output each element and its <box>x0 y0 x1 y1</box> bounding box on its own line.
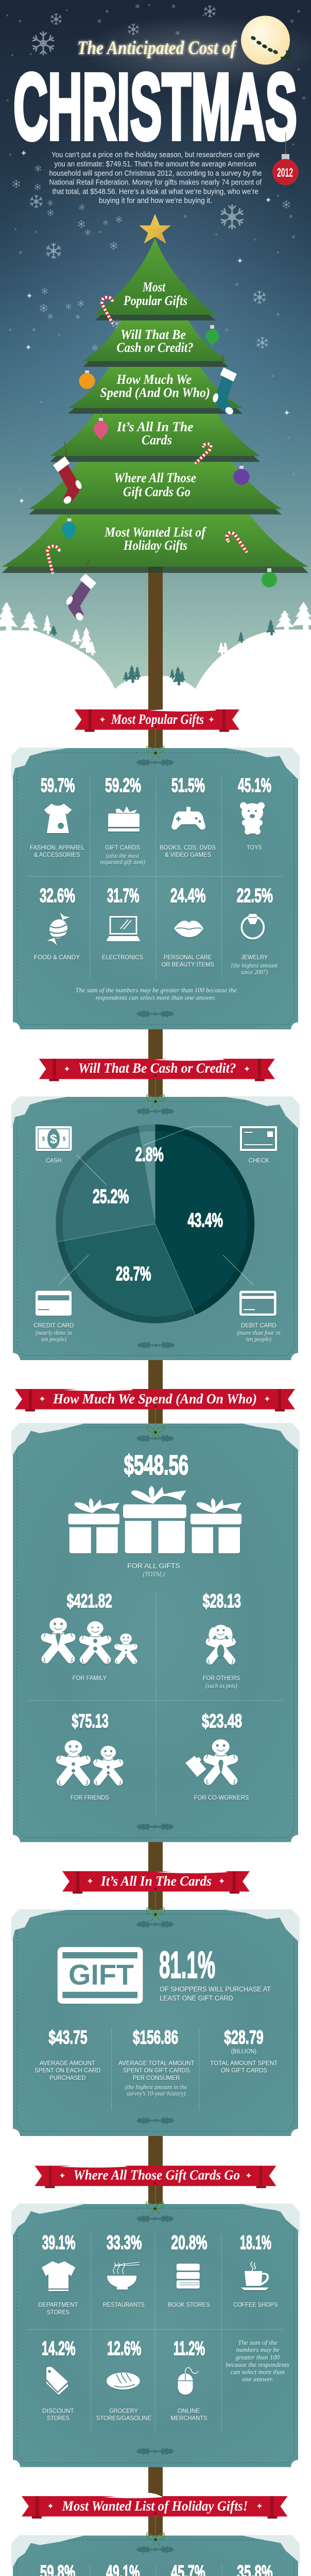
stat: average per consumer: SPENT ON GIFT CARDS <box>123 2067 189 2074</box>
tier shadows <box>2 315 308 573</box>
stat: average per consumer: survey’s 10-year history) <box>127 2090 185 2097</box>
stat: department stores: DEPARTMENT <box>38 2301 78 2308</box>
ornament green <box>205 316 219 346</box>
stat: books cds: & VIDEO GAMES <box>165 851 211 858</box>
stat: for co-workers: FOR CO-WORKERS <box>194 1794 249 1801</box>
stat: discount stores: STORES <box>47 2414 70 2421</box>
ornament pink <box>94 410 108 440</box>
tree menu labels: It’s All In The <box>116 419 194 434</box>
stat: gift cards: requested gift item) <box>100 858 145 866</box>
icon: books <box>177 2264 200 2289</box>
intro paragraph: National Retail Federation. Money for gifts makes nearly 74 percent of <box>49 178 262 187</box>
pie chart: 2.8% <box>135 1144 164 1165</box>
stat: personal care: PERSONAL CARE <box>164 954 212 961</box>
stat: average per card: SPENT ON EACH CARD <box>34 2067 100 2074</box>
ornament teal <box>62 510 76 540</box>
white pine trees <box>0 602 311 655</box>
slice: check <box>139 1124 155 1224</box>
stat: jewelry: 22.5% <box>237 885 273 907</box>
footnote: because the respondents <box>226 2361 289 2368</box>
intro paragraph: buying it for and how we’re buying it. <box>99 197 212 205</box>
icon: gingerbread pet <box>208 1625 234 1664</box>
ornament 2012 <box>272 132 299 185</box>
stat: jewelry: since 2007) <box>241 969 268 976</box>
stat: coffee shops: 18.1% <box>240 2232 271 2253</box>
stat: gift cards: 59.2% <box>105 775 141 796</box>
stat: for others: (such as pets) <box>205 1682 237 1689</box>
stat: online merchants <box>170 2338 207 2421</box>
label: debit card <box>237 1321 281 1343</box>
stat: fashion: 59.7% <box>41 775 75 796</box>
tree menu labels: Gift Cards Go <box>123 484 191 499</box>
star topper <box>140 214 170 243</box>
tree menu labels: Holiday Gifts <box>123 538 187 553</box>
stat: total billion: TOTAL AMOUNT SPENT <box>210 2060 278 2067</box>
stat: online merchants: 11.2% <box>174 2338 205 2360</box>
stat: book stores <box>168 2232 210 2308</box>
banner: most popular gifts: Most Popular Gifts <box>111 711 204 727</box>
tree tier 4 <box>50 414 260 456</box>
icon: cash: $ <box>62 1136 66 1142</box>
banner: how much we spend: How Much We Spend (And On Who) <box>53 1391 257 1406</box>
tree menu labels: Will That Be <box>120 327 186 342</box>
stat: average per consumer: PER CONSUMER <box>133 2074 180 2081</box>
ornament green ball <box>262 559 277 587</box>
stat: grocery gasoline: GROCERY <box>109 2407 138 2414</box>
label: cash: CASH <box>46 1157 61 1164</box>
banner: all in the cards <box>62 1868 250 1894</box>
footnote: The sum of the <box>238 2338 278 2346</box>
stat: 81.1 percent <box>159 1944 271 2002</box>
stat: for co-workers <box>185 1710 249 1801</box>
stat: total billion: (BILLION) <box>231 2047 256 2055</box>
candy cane 4 <box>47 546 59 572</box>
footnote <box>226 2338 289 2383</box>
panel: where gift cards go <box>11 2182 300 2467</box>
stat: average per consumer: (the highest amount in the <box>125 2083 187 2091</box>
stat: average per consumer <box>118 2027 195 2097</box>
icon: computer mouse <box>178 2374 193 2395</box>
banner: how much we spend <box>15 1385 295 1412</box>
stat: gift cards: (also the most <box>106 852 139 859</box>
stat: total billion <box>210 2027 278 2074</box>
panel: most wanted list <box>11 2513 300 2576</box>
banner: where gift cards go: Where All Those Gift Cards Go <box>73 2167 240 2183</box>
footnote: numbers may be <box>236 2346 280 2353</box>
icon: santa sleigh silhouette <box>250 36 292 59</box>
stat: discount stores: DISCOUNT <box>42 2407 74 2414</box>
stat: average per consumer: $156.86 <box>133 2027 178 2048</box>
stat: online merchants: MERCHANTS <box>170 2414 207 2421</box>
christmas tree <box>2 238 308 573</box>
title script: The Anticipated Cost of <box>77 38 237 59</box>
icon: ring <box>241 914 264 939</box>
pie chart: 28.7% <box>116 1263 151 1285</box>
icon: gingerbread friends <box>59 1740 121 1785</box>
stat: fashion <box>30 775 85 858</box>
stat: 81.1 percent: 81.1% <box>159 1944 215 1986</box>
stat: toys: 45.1% <box>238 775 271 796</box>
tree menu labels: How Much We <box>116 372 192 387</box>
panel: cash or credit <box>11 1075 300 1360</box>
stat: total billion: ON GIFT CARDS <box>221 2067 267 2074</box>
icon: cash: $ <box>42 1136 45 1142</box>
banner: cash or credit: Will That Be Cash or Credit? <box>78 1060 236 1076</box>
stat: toys: TOYS <box>247 844 262 851</box>
stat: electronics: ELECTRONICS <box>102 954 143 961</box>
icon: game controller <box>171 807 205 829</box>
stat: department stores <box>38 2232 78 2316</box>
stat: for friends: $75.13 <box>72 1710 109 1732</box>
label: credit card: (nearly three in <box>36 1329 72 1336</box>
slice: credit card <box>58 1224 195 1323</box>
icon: cash <box>36 1126 72 1151</box>
stat: books cds: 51.5% <box>171 775 205 796</box>
teal pine trees <box>49 619 275 685</box>
stat: grocery gasoline: 12.6% <box>107 2338 141 2360</box>
stat: for others <box>203 1590 241 1689</box>
stat: for co-workers: $23.48 <box>202 1710 242 1732</box>
label: credit card <box>34 1321 74 1343</box>
slice: debit card <box>155 1124 254 1315</box>
stat: for others: $28.13 <box>203 1590 241 1612</box>
stat: average per consumer: AVERAGE TOTAL AMOUNT <box>118 2060 195 2067</box>
candy cane 3 <box>227 533 246 551</box>
total spend stat: FOR ALL GIFTS <box>127 1562 180 1570</box>
icon: bread <box>107 2372 140 2389</box>
stat: for friends <box>59 1710 121 1801</box>
banner: most popular gifts <box>74 706 239 732</box>
stocking red <box>46 442 87 506</box>
icon: gift card large <box>58 1947 143 2004</box>
intro paragraph: that total, at $548.56. Here’s a look at what we’re buying, who we’re <box>53 188 258 196</box>
stat: electronics: 31.7% <box>107 885 139 907</box>
icon: credit card <box>36 1291 72 1316</box>
tree menu labels: Most Wanted List of <box>104 524 206 540</box>
footnote <box>75 986 237 1002</box>
label: debit card: DEBIT CARD <box>241 1321 277 1329</box>
intro paragraph: household will spend on Christmas 2012, according to a survey by the <box>49 170 262 178</box>
icon: laptop <box>107 916 140 941</box>
stocking teal <box>210 355 244 416</box>
intro paragraph: You can’t put a price on the holiday season, but researchers can give <box>51 151 260 159</box>
stat: book stores: 20.8% <box>171 2232 207 2253</box>
stat: electronics <box>102 885 143 961</box>
stat: grocery gasoline: STORES/GASOLINE <box>96 2414 151 2421</box>
footnote: can select more than <box>231 2368 285 2376</box>
tree tier 2 <box>83 320 228 361</box>
total spend stat <box>68 1450 241 1578</box>
icon: noodle bowl <box>107 2276 136 2290</box>
stat: grocery gasoline <box>96 2338 151 2421</box>
stat: food candy <box>34 885 80 961</box>
background: night sky <box>0 0 311 693</box>
stat: personal care: OR BEAUTY ITEMS <box>162 961 214 968</box>
stat: fashion: FASHION, APPAREL <box>30 844 85 851</box>
panel: how much we spend <box>11 1405 300 1842</box>
stat: for family <box>44 1590 135 1682</box>
footnote: The sum of the numbers may be greater than 100 because the <box>75 986 237 994</box>
tree tier 1 <box>95 238 216 315</box>
snow hills and white ground <box>0 630 311 2576</box>
pie chart: 25.2% <box>93 1186 129 1208</box>
icon: three gifts <box>68 1486 241 1553</box>
stat: personal care <box>162 885 214 968</box>
stat: average per card: AVERAGE AMOUNT <box>40 2060 95 2067</box>
footnote: one answer. <box>242 2375 273 2383</box>
total spend stat: $548.56 <box>124 1450 188 1481</box>
icon: gift box <box>108 806 140 832</box>
stat: department stores: STORES <box>47 2309 70 2316</box>
tree trunk post <box>148 564 163 2576</box>
banner: most wanted list: Most Wanted List of Holiday Gifts! <box>62 2498 248 2514</box>
panel: most popular gifts <box>11 725 300 1029</box>
slice: cash <box>56 1126 155 1242</box>
label: debit card: ten people) <box>246 1335 271 1343</box>
moon with santa sleigh <box>241 15 292 65</box>
banner: where gift cards go <box>34 2162 277 2188</box>
stat: discount stores <box>42 2338 75 2421</box>
stat: books cds <box>160 775 216 858</box>
stat: for friends: FOR FRIENDS <box>71 1794 109 1801</box>
stat: jewelry: JEWELRY <box>241 954 268 961</box>
tree menu labels: Where All Those <box>114 470 196 485</box>
icon: gingerbread family <box>44 1618 135 1663</box>
stat: 81.1 percent: LEAST ONE GIFT CARD <box>160 1994 233 2002</box>
footnote: respondents can select more than one answer. <box>96 994 216 1002</box>
stat: for family: FOR FAMILY <box>73 1674 107 1682</box>
stat: 81.1 percent: OF SHOPPERS WILL PURCHASE AT <box>160 1985 271 1993</box>
stocking purple <box>61 560 103 623</box>
tree menu labels: Most <box>142 279 166 295</box>
tree menu labels <box>100 279 210 553</box>
icon: price tags <box>46 2367 68 2395</box>
ornament 2012: 2012 <box>277 166 293 180</box>
icon: cash: $ <box>50 1132 57 1146</box>
icon: coffee cup <box>241 2271 269 2290</box>
stat: food candy: FOOD & CANDY <box>34 954 80 961</box>
pie chart <box>56 1124 254 1323</box>
icon: debit card <box>239 1291 277 1316</box>
stat: personal care: 24.4% <box>170 885 206 907</box>
stat: restaurants <box>103 2232 145 2308</box>
icon: teddy bear <box>240 802 265 835</box>
stat: average per card: $43.75 <box>48 2027 88 2048</box>
banner: cash or credit <box>39 1055 275 1081</box>
stat: restaurants: 33.3% <box>107 2232 142 2253</box>
stat: coffee shops: COFFEE SHOPS <box>233 2301 278 2308</box>
footnote: greater than 100 <box>236 2353 280 2361</box>
stat: total billion: $28.79 <box>224 2027 264 2048</box>
stat: fashion: & ACCESSORIES <box>34 851 80 858</box>
stat: gift cards <box>100 775 145 866</box>
tree menu labels: Popular Gifts <box>123 293 187 308</box>
icon: shirt dress <box>44 804 72 833</box>
stat: gift cards: GIFT CARDS <box>105 844 140 851</box>
tree tier 6 <box>2 514 308 567</box>
stat: food candy: 32.6% <box>40 885 75 907</box>
tree menu labels: Spend (And On Who) <box>100 385 210 400</box>
tree tier 5 <box>29 462 282 509</box>
icon: gift card large: GIFT <box>68 1958 134 1991</box>
label: credit card: CREDIT CARD <box>34 1321 74 1329</box>
intro paragraph <box>49 151 262 205</box>
stat: for others: FOR OTHERS <box>203 1674 240 1682</box>
label: debit card: (more than four in <box>237 1329 281 1336</box>
icon: check <box>241 1127 276 1150</box>
pie chart: 43.4% <box>187 1210 223 1231</box>
tree ornaments <box>46 297 277 623</box>
stat: restaurants: RESTAURANTS <box>103 2301 145 2308</box>
icon: gingerbread co-worker <box>185 1739 235 1784</box>
label: check: CHECK <box>249 1157 269 1164</box>
total spend stat: (TOTAL) <box>143 1571 165 1578</box>
candy cane 1 <box>102 297 112 323</box>
stat: jewelry <box>231 885 278 976</box>
candy cane 2 <box>196 444 211 463</box>
tree menu labels: Cash or Credit? <box>116 340 194 355</box>
stat: average per card <box>34 2027 100 2081</box>
ornament orange <box>79 362 95 389</box>
stat: toys <box>238 775 271 851</box>
stat: for family: $421.82 <box>67 1590 112 1612</box>
stat: books cds: BOOKS, CDS, DVDS <box>160 844 216 851</box>
tree menu labels: Cards <box>142 433 172 448</box>
icon: lips <box>174 921 203 937</box>
stat: online merchants: ONLINE <box>178 2407 200 2414</box>
label: credit card: ten people) <box>41 1335 66 1343</box>
stat: average per card: PURCHASED <box>49 2074 86 2081</box>
stat: jewelry: (the highest amount <box>231 962 278 969</box>
stat: book stores: BOOK STORES <box>168 2301 210 2308</box>
stat: department stores: 39.1% <box>42 2232 75 2253</box>
stat: coffee shops <box>233 2232 278 2308</box>
panel: all in the cards <box>11 1888 300 2136</box>
banner: all in the cards: It’s All In The Cards <box>100 1873 212 1889</box>
intro paragraph: you an estimate: $749.51. That’s the amount the average American <box>55 160 256 168</box>
banner: most wanted list <box>22 2493 287 2518</box>
ornament purple <box>234 457 249 485</box>
stat: discount stores: 14.2% <box>42 2338 75 2360</box>
icon: candy <box>44 911 73 946</box>
tree tier 3 <box>68 367 243 408</box>
icon: polo shirt <box>42 2261 75 2291</box>
